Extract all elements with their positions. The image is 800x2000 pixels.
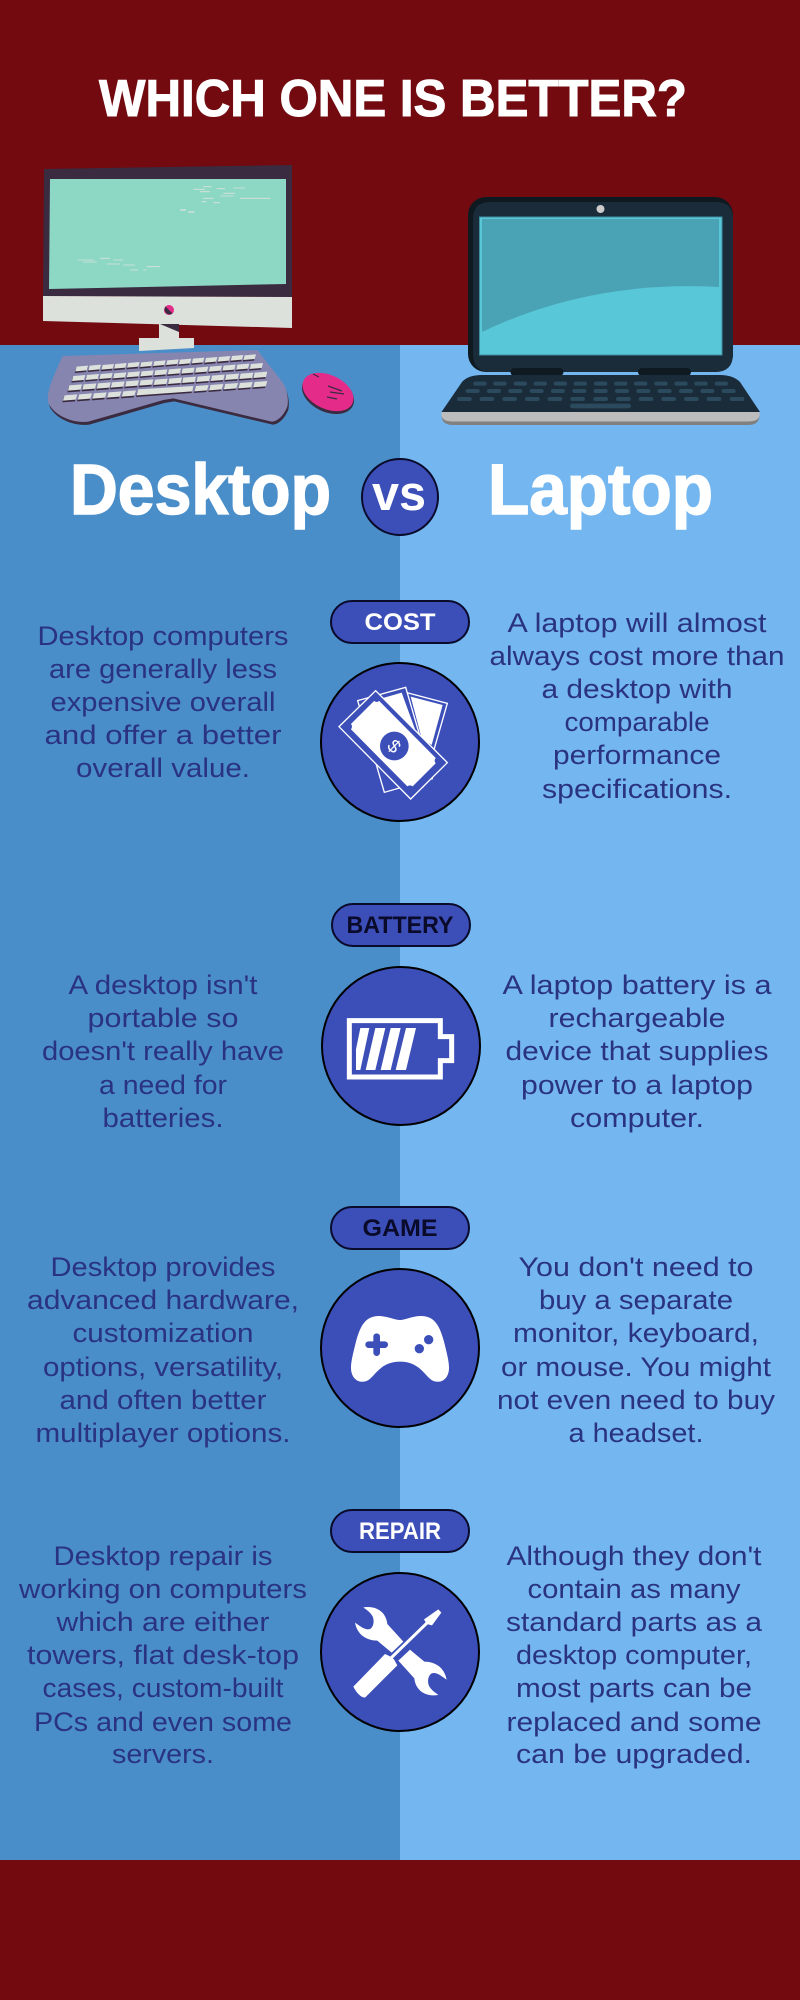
laptop keys [459,384,742,406]
monitor chin [43,296,292,328]
monitor stand [139,324,194,351]
text: laptop battery: rechargeable [548,1003,726,1033]
text: desktop battery: a need for [99,1070,227,1100]
laptop front edge [442,412,760,425]
text: desktop cost: are generally less [49,654,277,684]
text: laptop repair: replaced and some [506,1707,762,1737]
heading: Desktop: Desktop [70,451,331,530]
text: desktop game: multiplayer options. [36,1418,290,1448]
hinges [510,368,691,376]
text: laptop cost: performance [553,740,721,770]
label: battery: BATTERY [346,912,454,939]
text: laptop cost: specifications. [542,774,732,804]
text: desktop repair: which are either [55,1607,269,1637]
heading: Laptop: Laptop [488,451,713,530]
text: laptop game: You don't need to [518,1252,754,1282]
laptop lid [468,197,733,372]
text: laptop repair: can be upgraded. [516,1739,752,1769]
label: repair [331,1510,469,1552]
row: battery [42,904,773,1133]
title: WHICH ONE IS BETTER? [99,70,687,128]
screen speckles [77,187,270,270]
text: laptop game: monitor, keyboard, [513,1318,759,1348]
icon: banknotes [321,663,479,821]
label: game: GAME [362,1215,438,1242]
text: laptop cost: A laptop will almost [508,608,767,638]
text: desktop repair [18,1541,307,1769]
text: laptop repair: desktop computer, [516,1640,752,1670]
label: game [331,1207,469,1249]
text: laptop cost: comparable [564,707,710,737]
text: desktop cost: overall value. [76,753,250,783]
screen reflection [482,219,719,332]
text: desktop game [27,1252,299,1448]
label: cost: COST [364,609,436,636]
text: desktop game: customization [72,1318,254,1348]
background: laptop column [400,345,800,1860]
text: desktop cost: and offer a better [44,720,282,750]
icon: wrench and screwdriver [321,1573,479,1731]
text: desktop repair: servers. [112,1739,214,1769]
row: repair [18,1510,763,1769]
text: desktop repair: PCs and even some [34,1707,292,1737]
text: desktop battery [42,970,284,1133]
text: desktop battery: portable so [88,1003,238,1033]
text: desktop repair: towers, flat desk-top [27,1640,299,1670]
keyboard body [48,350,289,425]
text: laptop cost: always cost more than [490,641,784,671]
text: desktop game: Desktop provides [50,1252,276,1282]
text: laptop repair: Although they don't [506,1541,762,1571]
label: battery [332,904,470,946]
text: laptop battery: computer. [570,1103,704,1133]
text: desktop repair: working on computers [18,1574,307,1604]
text: laptop repair: standard parts as a [506,1607,763,1637]
illustration: desktop computer [43,165,361,425]
row: game [27,1207,776,1448]
text: desktop cost: Desktop computers [38,621,288,651]
webcam [596,205,604,213]
text: desktop cost: expensive overall [50,687,276,717]
text: desktop game: options, versatility, [43,1352,283,1382]
label: repair: REPAIR [359,1518,441,1545]
text: laptop battery [502,970,773,1133]
text: laptop game: not even need to buy [497,1385,776,1415]
text: desktop battery: batteries. [102,1103,224,1133]
text: desktop battery: doesn't really have [42,1036,284,1066]
text: desktop cost [38,621,288,783]
text: laptop game: or mouse. You might [501,1352,772,1382]
monitor frame [43,165,292,297]
text: laptop game [497,1252,776,1448]
text: laptop game: buy a separate [539,1285,733,1315]
text: desktop game: and often better [60,1385,266,1415]
icon: game controller [321,1269,479,1427]
text: laptop repair: contain as many [528,1574,741,1604]
icon: battery [322,967,480,1125]
text: desktop battery: A desktop isn't [68,970,258,1000]
background: desktop column [0,345,400,1860]
laptop bezel [473,202,733,372]
badge: vs: vs [372,467,426,521]
text: laptop game: a headset. [568,1418,704,1448]
text: laptop cost [490,608,784,804]
keyboard keys [62,354,267,402]
text: laptop battery: power to a laptop [521,1070,753,1100]
text: desktop repair: cases, custom-built [42,1673,284,1703]
text: laptop cost: a desktop with [542,674,732,704]
background: bottom banner [0,1860,800,2000]
label: cost [331,601,469,643]
text: laptop repair: most parts can be [516,1673,752,1703]
monitor logo dot [164,305,174,315]
text: laptop repair [506,1541,763,1769]
background: top banner [0,0,800,345]
text: desktop repair: Desktop repair is [54,1541,272,1571]
text: desktop game: advanced hardware, [27,1285,299,1315]
icon: banknotes: $ [383,735,406,758]
row: cost [38,601,784,821]
laptop screen [480,217,722,355]
laptop base [442,375,760,412]
mouse [295,365,361,422]
monitor screen [49,179,286,289]
badge: vs [362,459,438,535]
text: laptop battery: A laptop battery is a [502,970,773,1000]
text: laptop battery: device that supplies [506,1036,768,1066]
illustration: laptop [442,197,760,425]
